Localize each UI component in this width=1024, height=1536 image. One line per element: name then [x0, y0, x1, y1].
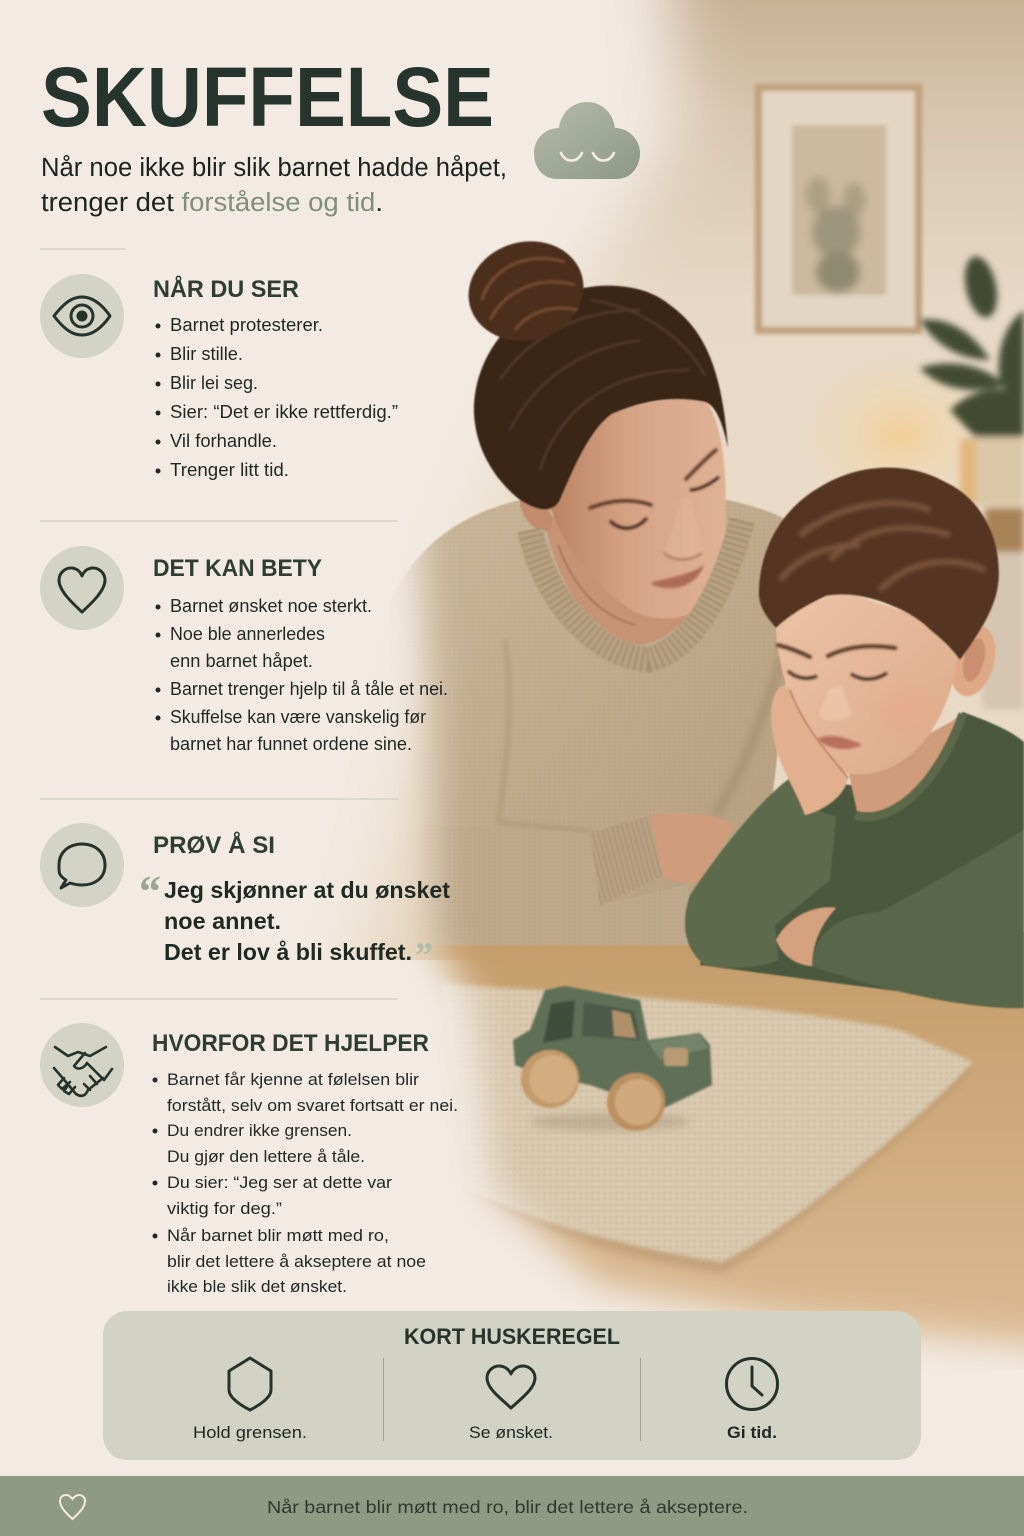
boy hand on cheek	[771, 686, 848, 815]
icon: shield	[229, 1358, 271, 1410]
bullet list: Trenger litt tid.	[170, 460, 289, 480]
boy facial features	[774, 641, 898, 750]
bullet list: Blir lei seg.	[170, 373, 258, 393]
icon: eye	[40, 274, 124, 358]
section: det kan bety	[40, 546, 448, 754]
photo: mother and sad boy at a table	[300, 0, 1024, 1370]
heading: HVORFOR DET HJELPER	[152, 1030, 429, 1057]
sweater arm shading	[498, 640, 592, 832]
bullet list: forstått, selv om svaret fortsatt er nei.	[167, 1096, 458, 1115]
mother hair bun	[468, 240, 584, 340]
bullet list: ikke ble slik det ønsket.	[167, 1277, 347, 1296]
mother sweater	[401, 499, 786, 905]
label: hold grensen: Hold grensen.	[193, 1423, 307, 1442]
photo wall	[300, 0, 1024, 960]
icon: heart	[40, 546, 124, 630]
bullet list: Barnet trenger hjelp til å tåle et nei.	[170, 679, 448, 699]
bullet list: Barnet ønsket noe sterkt.	[170, 596, 372, 616]
icon: sleeping cloud	[534, 102, 640, 179]
icon: handshake	[40, 1023, 124, 1107]
boy right sleeve	[812, 830, 1024, 1008]
bullet list: Sier: “Det er ikke rettferdig.”	[170, 402, 398, 422]
bullet list: blir det lettere å akseptere at noe	[167, 1252, 426, 1271]
quote: noe annet.	[164, 908, 281, 934]
mother neck	[546, 516, 688, 646]
table	[400, 932, 1024, 1370]
mother face	[548, 399, 726, 618]
bullet list: barnet har funnet ordene sine.	[170, 734, 412, 754]
panel: kort huskeregel	[103, 1311, 921, 1460]
bullet list: Når barnet blir møtt med ro,	[167, 1226, 389, 1245]
boy arm hand	[776, 907, 836, 966]
lamp glow	[827, 377, 966, 481]
photo foreground	[390, 229, 1024, 1370]
rug	[440, 984, 973, 1274]
boy neck	[848, 718, 957, 814]
footer bar	[0, 1476, 1024, 1536]
title: SKUFFELSE	[41, 50, 494, 144]
mother ear	[520, 500, 551, 532]
subtitle: trenger det forståelse og tid .	[41, 189, 383, 217]
bullet list	[156, 315, 398, 480]
bullet list: Barnet får kjenne at følelsen blir	[167, 1070, 419, 1089]
icon: footer heart	[60, 1495, 85, 1519]
bullet list: enn barnet håpet.	[170, 651, 313, 671]
boy ear	[952, 626, 996, 697]
sweater collar	[530, 520, 742, 660]
boy	[685, 468, 1024, 1008]
subtitle	[41, 154, 507, 217]
quote: Jeg skjønner at du ønsket	[164, 877, 450, 903]
bullet list: Barnet protesterer.	[170, 315, 323, 335]
quote: Det er lov å bli skuffet.	[164, 939, 412, 965]
boy face	[776, 590, 958, 774]
icon: clock	[726, 1358, 778, 1410]
bullet list	[156, 596, 448, 754]
heading: PRØV Å SI	[153, 831, 275, 859]
quote: “	[139, 867, 161, 916]
bullet list: Noe ble annerledes	[170, 624, 325, 644]
bullet list: viktig for deg.”	[167, 1199, 282, 1218]
boy hair	[759, 468, 999, 660]
bullet list: Blir stille.	[170, 344, 243, 364]
wall picture frame	[755, 84, 922, 334]
bullet list: Du sier: “Jeg ser at dette var	[167, 1173, 392, 1192]
section: prøv å si	[40, 823, 450, 975]
bullet list: Skuffelse kan være vanskelig før	[170, 707, 426, 727]
icon: heart	[487, 1366, 535, 1408]
mother facial features	[590, 450, 719, 588]
bullet list: Du gjør den lettere å tåle.	[167, 1147, 365, 1166]
mother hand	[650, 813, 735, 883]
toy tractor	[513, 986, 712, 1131]
bullet list: Vil forhandle.	[170, 431, 277, 451]
plant and pot	[920, 254, 1024, 710]
section: når du ser	[40, 274, 398, 480]
footer text: Når barnet blir møtt med ro, blir det lettere å akseptere.	[267, 1497, 748, 1517]
mother	[390, 229, 790, 945]
icon: speech bubble	[40, 823, 124, 907]
boy shirt	[700, 712, 1024, 1008]
mother hair	[474, 286, 728, 509]
photo room background	[300, 0, 1024, 960]
mother sleeve and cuff	[574, 833, 688, 944]
quote	[139, 867, 450, 975]
label: gi tid: Gi tid.	[727, 1423, 777, 1442]
bullet list	[152, 1070, 458, 1296]
heading: DET KAN BETY	[153, 555, 322, 582]
subtitle: Når noe ikke blir slik barnet hadde håpet,	[41, 154, 507, 182]
quote: ”	[415, 935, 433, 975]
label: se ønsket: Se ønsket.	[469, 1423, 553, 1442]
panel heading: KORT HUSKEREGEL	[404, 1324, 620, 1349]
section: hvorfor det hjelper	[40, 1023, 458, 1296]
heading: NÅR DU SER	[153, 275, 299, 303]
boy left sleeve	[685, 778, 836, 968]
bullet list: Du endrer ikke grensen.	[167, 1121, 352, 1140]
